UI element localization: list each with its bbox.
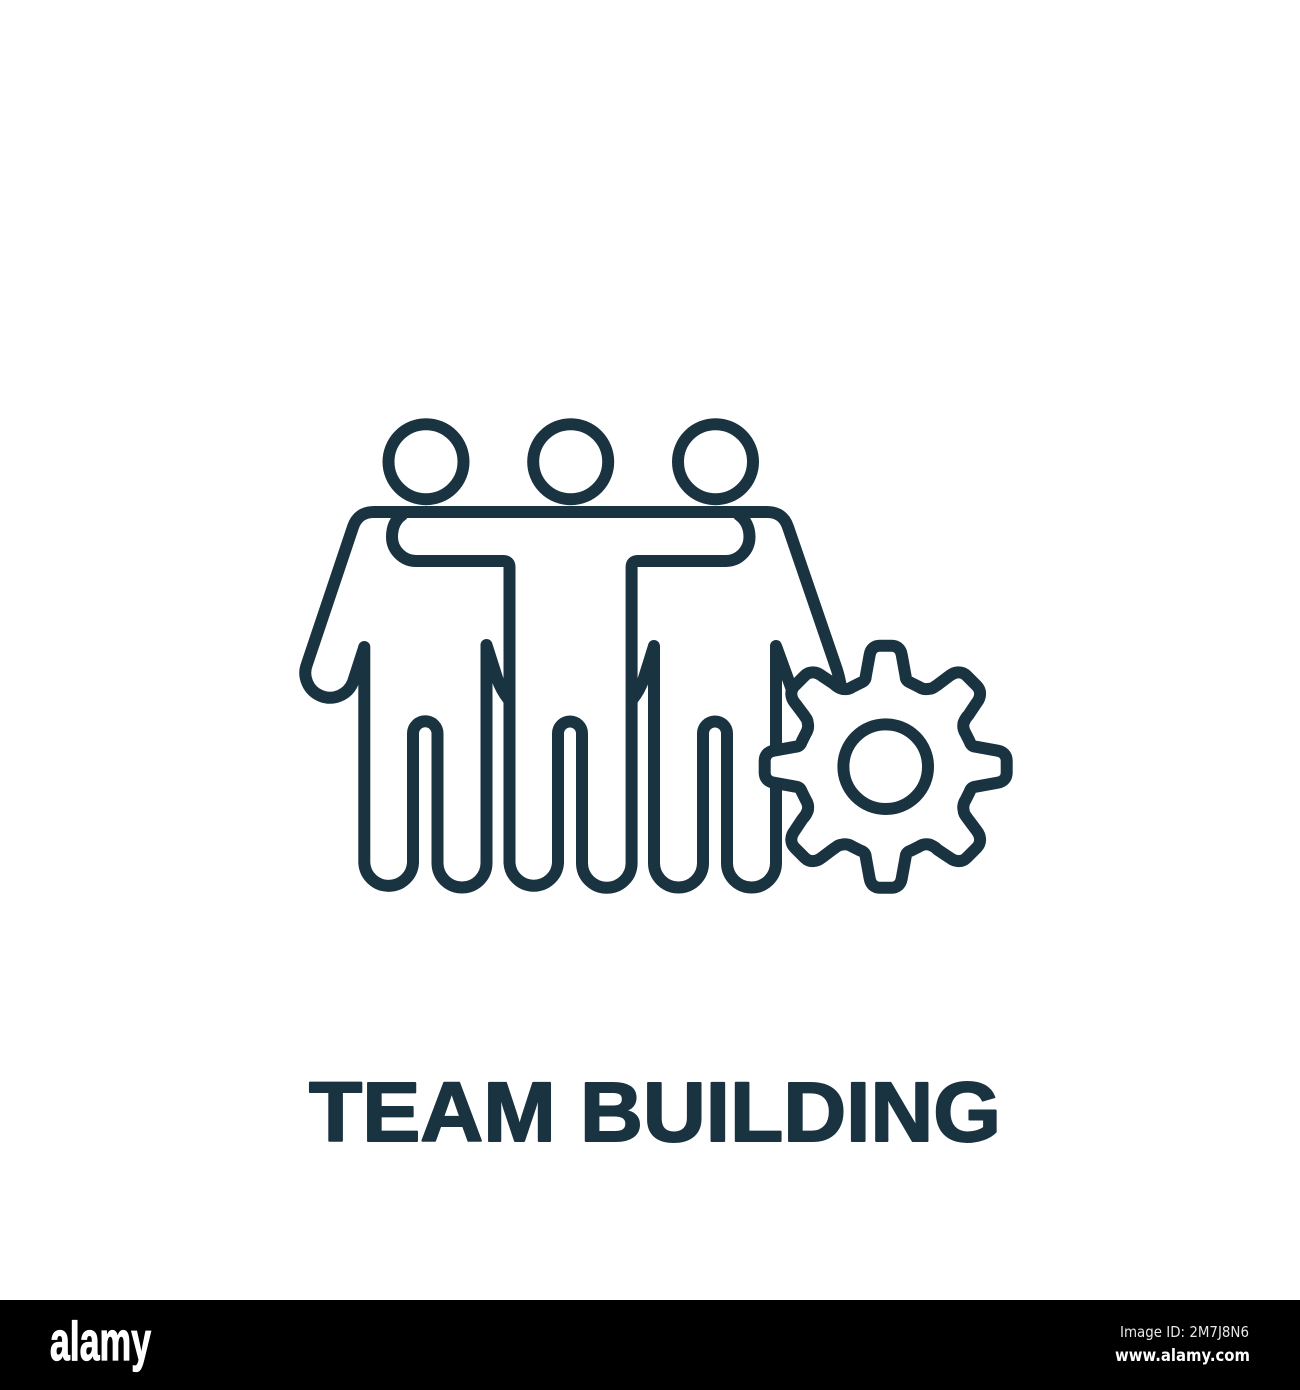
image id: Image ID: 2M7J8N6	[1120, 1323, 1249, 1341]
icon: shoulders and outer arms	[305, 512, 841, 698]
footer logo: alamy	[50, 1310, 151, 1372]
icon: team of three people with gear	[305, 424, 1007, 888]
icon: middle person arms and legs	[392, 515, 750, 888]
footer bar	[0, 1300, 1300, 1390]
icon: right person head	[678, 424, 753, 499]
title: TEAM BUILDING	[309, 1065, 1001, 1159]
icon: gear	[765, 646, 1007, 888]
website: www.alamy.com	[1115, 1346, 1250, 1366]
icon: middle person head	[533, 424, 608, 499]
icon: right person legs	[632, 646, 792, 887]
icon: left person legs	[364, 645, 509, 887]
icon: left person head	[388, 424, 464, 499]
